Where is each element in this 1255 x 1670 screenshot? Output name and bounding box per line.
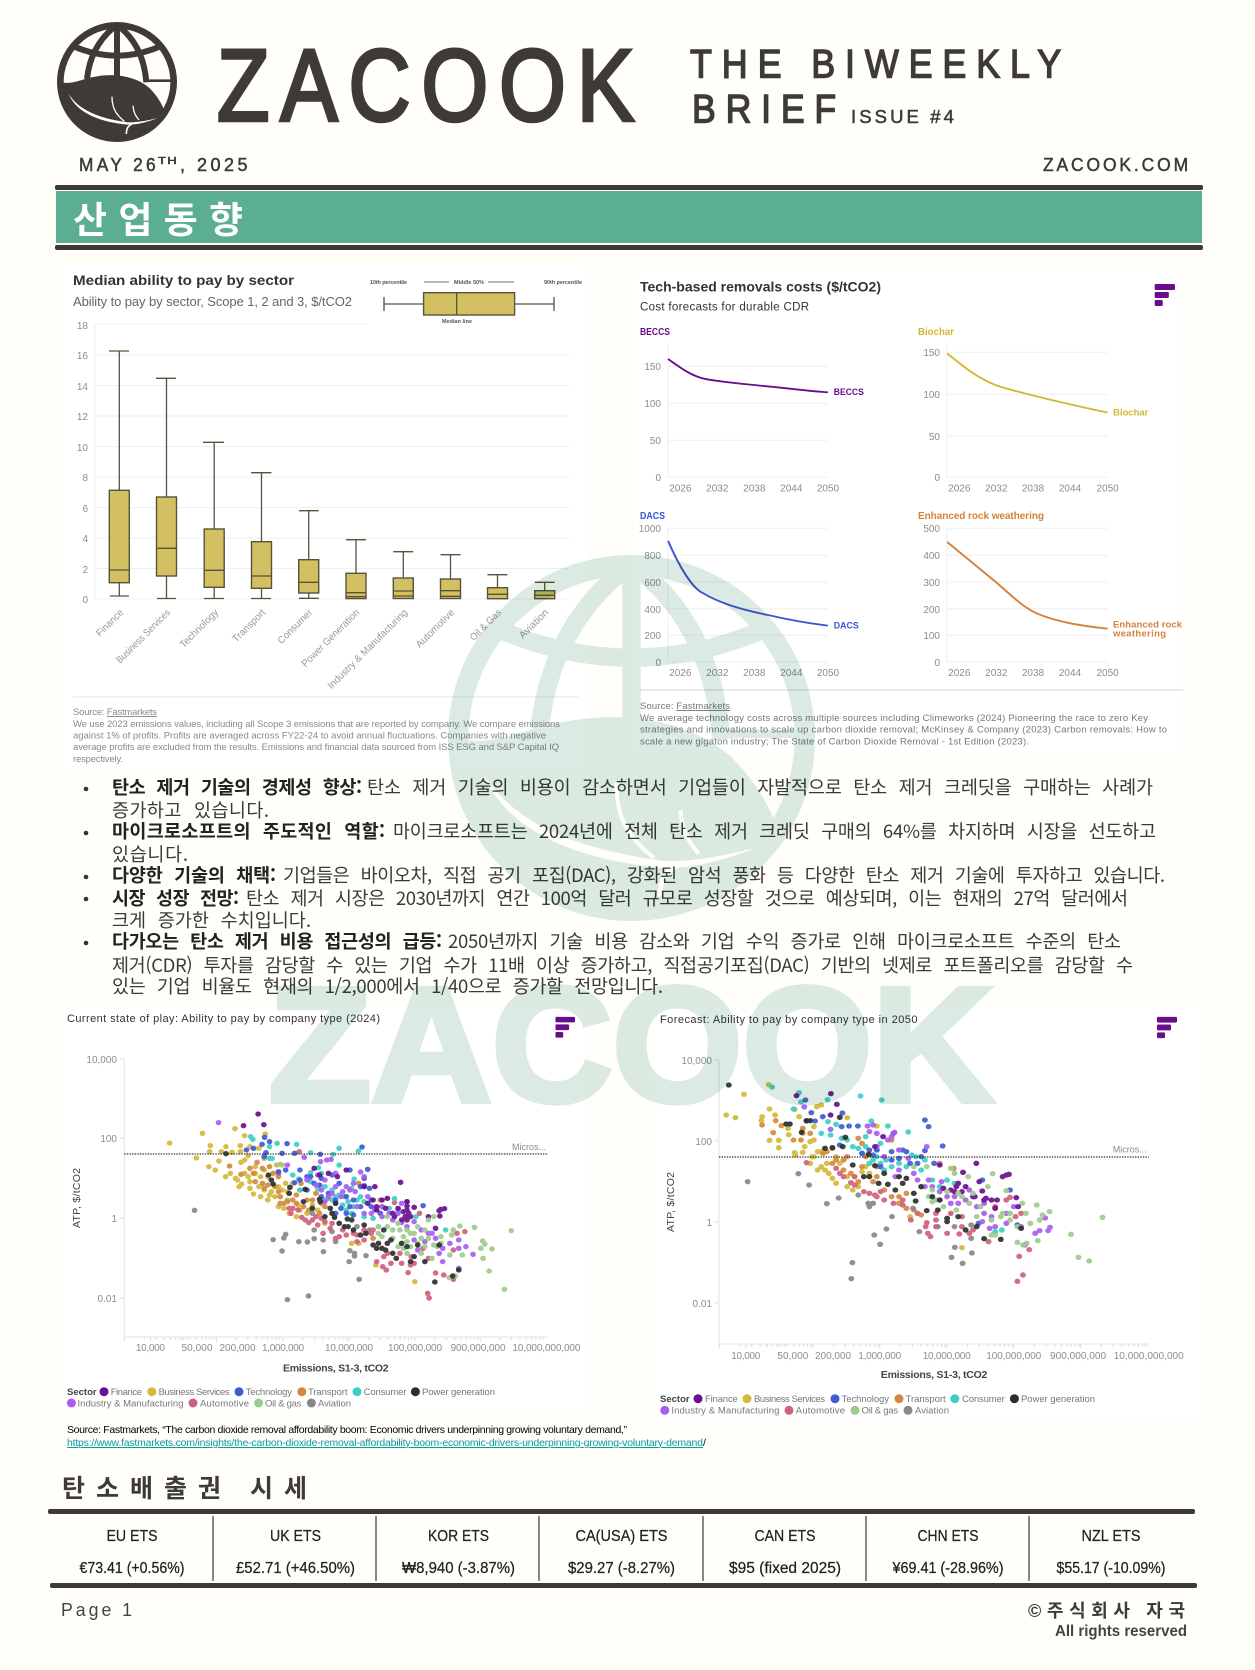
bullet: diverse technologies: 기업들은 바이오차, 직접 공기 포집(DAC), 강화된 암석 풍화 등 다양한 탄소 제거 기술에 투자하고 있습니다. (283, 862, 1165, 888)
small multiple: enhanced rock weathering: 2032 (985, 668, 1008, 679)
small multiple: BECCS: 2032 (706, 484, 729, 495)
box: automotive (440, 555, 460, 598)
section heading: carbon credit prices: 탄소배출권 시세 (62, 1469, 307, 1505)
legend: Sector (660, 1394, 690, 1405)
small multiple: BECCS: 150 (644, 362, 661, 373)
legend: Oil & gas (862, 1406, 898, 1417)
text block: key points (84, 774, 1165, 999)
small multiple: enhanced rock weathering: 2026 (948, 668, 971, 679)
reference line: microsoft: Micros... (1113, 1145, 1147, 1155)
legend: Sector (67, 1387, 97, 1398)
small multiple: BECCS (640, 327, 864, 495)
small multiple: biochar: Biochar (918, 327, 954, 338)
website: ZACOOK.COM (1043, 155, 1191, 175)
y axis labels: 10,000 (86, 1055, 117, 1066)
box: power generation (346, 540, 366, 599)
legend: Consumer (364, 1387, 406, 1398)
legend: Finance (111, 1387, 142, 1398)
small multiple: BECCS: 2044 (780, 484, 803, 495)
small multiple: biochar: 2044 (1059, 484, 1082, 495)
x axis sector labels (94, 607, 551, 691)
watermark: globe and wordmark: ZACOOK (269, 953, 993, 1136)
section banner: industry trends (55, 185, 1203, 250)
x axis labels: 10,000,000,000 (1114, 1351, 1184, 1362)
x axis labels: 10,000 (731, 1351, 761, 1362)
small multiple: enhanced rock weathering: 2044 (1059, 668, 1082, 679)
small multiple: BECCS: 2038 (743, 484, 766, 495)
dots (170, 1114, 511, 1300)
small multiple: biochar: 50 (929, 432, 940, 443)
bullet: microsoft role (84, 818, 1156, 867)
legend: Industry & Manufacturing (78, 1398, 184, 1410)
small multiple: biochar: 2050 (1096, 484, 1119, 495)
small multiple: biochar: 150 (923, 348, 940, 359)
bullet: accessibility: 다가오는 탄소 제거 비용 접근성의 급등: (112, 928, 442, 954)
source note: strategies and innovations to scale up carbon dioxide removal; McKinsey & Company (2023) Carbon removals: How to (640, 725, 1167, 736)
box: business services (156, 378, 176, 598)
y axis labels: 18 (77, 321, 88, 332)
legend: Aviation (318, 1398, 351, 1410)
cell: UK ETS (236, 1528, 355, 1577)
bullet: microsoft role: 있습니다. (112, 841, 188, 867)
legend: Industry & Manufacturing (671, 1406, 779, 1417)
x axis sector labels: Technology (178, 607, 221, 650)
x axis sector labels: Oil & Gas (468, 607, 504, 643)
y axis labels: 8 (82, 473, 88, 484)
legend: Finance (705, 1394, 738, 1405)
date: , 2025 (180, 155, 251, 175)
legend (660, 1394, 1095, 1417)
small multiple: biochar: Biochar (1113, 408, 1149, 419)
x axis labels (731, 1351, 1184, 1362)
legend (67, 1387, 495, 1410)
source note: scale a new gigaton industry; The State of Carbon Dioxide Removal - 1st Edition (2023). (640, 737, 1029, 748)
x axis labels: 10,000 (136, 1343, 165, 1354)
y axis labels: 16 (77, 351, 88, 362)
source note (73, 707, 560, 765)
small multiple: BECCS: 50 (650, 436, 661, 447)
cell: CHN ETS (892, 1528, 1004, 1577)
x axis sector labels: Finance (94, 607, 126, 639)
brand name: ZACOOK (217, 28, 645, 142)
y axis labels: 10 (77, 443, 88, 454)
small multiple: enhanced rock weathering: 400 (923, 551, 940, 562)
small multiple: biochar (918, 327, 1149, 495)
x axis labels: 1,000,000 (262, 1343, 304, 1354)
box: aviation (535, 582, 555, 599)
y axis labels: 1 (111, 1214, 117, 1225)
axes (715, 1060, 1149, 1348)
small multiple: biochar: 0 (934, 473, 940, 484)
cell: KOR ETS: KOR ETS (428, 1528, 489, 1545)
small multiple: enhanced rock weathering: 2050 (1096, 668, 1119, 679)
reference line: microsoft: Micros... (512, 1142, 546, 1152)
box: oil and gas (488, 575, 508, 599)
small multiple: biochar: 2032 (985, 484, 1008, 495)
x axis sector labels: Aviation (517, 607, 551, 641)
source note: Source: Fastmarkets (73, 707, 157, 718)
source note: Source: Fastmarkets (640, 701, 730, 712)
legend: Consumer (962, 1394, 1005, 1405)
small multiple: DACS (639, 511, 859, 679)
footer: copyright: ©주식회사 자국 (1028, 1601, 1185, 1621)
source citation: / (703, 1437, 706, 1449)
x axis labels: 50,000 (777, 1351, 809, 1362)
small multiple: enhanced rock weathering: 100 (923, 631, 940, 642)
chart subtitle: Ability to pay by sector, Scope 1, 2 and 3, $/tCO2 (73, 294, 352, 309)
x axis sector labels: Transport (231, 607, 268, 645)
issue number: ISSUE #4 (851, 107, 957, 127)
publication title line one: THE BIWEEKLY (690, 42, 1071, 86)
small multiple: BECCS: 2026 (669, 484, 692, 495)
small multiple: DACS: 800 (644, 551, 661, 562)
x axis labels: 50,000 (182, 1343, 213, 1354)
bullet: accessibility (84, 928, 1133, 999)
cell: CA(USA) ETS: $29.27 (-8.27%) (568, 1560, 675, 1577)
cell: CHN ETS: ¥69.41 (-28.96%) (892, 1560, 1004, 1577)
small multiple: enhanced rock weathering: 300 (923, 578, 940, 589)
cell: CAN ETS (729, 1528, 841, 1577)
x axis labels: 900,000,000 (450, 1343, 506, 1354)
y axis labels: 100 (100, 1134, 117, 1145)
y axis labels: 12 (77, 412, 88, 423)
legend: Technology (246, 1387, 292, 1398)
box: finance (109, 351, 129, 596)
small multiple: BECCS: 0 (655, 473, 661, 484)
cell: UK ETS: £52.71 (+46.50%) (236, 1560, 355, 1577)
chart subtitle: Cost forecasts for durable CDR (640, 302, 809, 314)
chart heading: Current state of play: Ability to pay by company type (2024) (67, 1013, 380, 1025)
box: transport (251, 473, 272, 598)
x axis labels: 900,000,000 (1050, 1351, 1106, 1362)
legend: Automotive (200, 1398, 249, 1410)
x axis sector labels: Industry & Manufacturing (326, 607, 410, 691)
bullet: market growth: 탄소 제거 시장은 2030년까지 연간 100억 달러 규모로 성장할 것으로 예상되며, 이는 현재의 27억 달러에서 (246, 885, 1128, 911)
small multiple: DACS: DACS (834, 620, 859, 631)
legend: Business Services (159, 1387, 230, 1398)
small multiple: DACS: 2026 (669, 668, 692, 679)
y axis title: ATP, $/tCO2 (71, 1168, 83, 1228)
panel: median ability to pay box plot (60, 265, 586, 770)
bullet: affordability: 증가하고 있습니다. (112, 797, 269, 823)
box: industry and manufacturing (393, 552, 413, 598)
box: consumer (299, 511, 319, 598)
cell: NZL ETS (1056, 1528, 1166, 1577)
footer: copyright (1028, 1601, 1187, 1640)
footer: page number: Page 1 (61, 1600, 135, 1620)
box plot legend: Middle 50% (454, 280, 484, 286)
x axis labels: 100,000,000 (986, 1351, 1042, 1362)
small multiple: enhanced rock weathering: Enhanced rock weathering (918, 511, 1044, 522)
source note: We use 2023 emissions values, including all Scope 3 emissions that are reported by company. We compare emissions (73, 719, 560, 730)
small multiple: DACS: 400 (644, 605, 661, 616)
panel: forecast scatter chart (651, 1007, 1200, 1421)
y axis labels: 100 (695, 1137, 712, 1148)
y axis labels: 2 (82, 565, 88, 576)
y axis labels (86, 1055, 117, 1305)
bullet: affordability (84, 774, 1153, 823)
legend: Automotive (796, 1406, 845, 1417)
y axis labels: 10,000 (681, 1056, 712, 1067)
icon: globe and leaf logo (57, 25, 175, 139)
source citation (67, 1424, 706, 1449)
x axis labels: 200,000 (815, 1351, 851, 1362)
y axis labels (681, 1056, 712, 1310)
source note: average profits are excluded from the results. Emissions and financial data sourced from ISS ESG and S&P Capital IQ (73, 742, 559, 753)
small multiple: DACS: 200 (644, 631, 661, 642)
cell: CHN ETS: CHN ETS (918, 1528, 978, 1545)
cell: CAN ETS: CAN ETS (754, 1528, 816, 1545)
dots (726, 1085, 1102, 1281)
chart heading: Tech-based removals costs ($/tCO2) (640, 280, 881, 295)
legend: Power generation (1021, 1394, 1095, 1405)
masthead (57, 25, 1191, 175)
x axis sector labels: Business Services (114, 607, 173, 666)
x axis labels: 1,000,000 (858, 1351, 902, 1362)
source note: against 1% of profits. Profits are averaged across FY22-24 to avoid annual fluctuations. Companies with negative (73, 730, 546, 742)
legend: Aviation (915, 1406, 949, 1417)
small multiple: BECCS: 100 (644, 399, 661, 410)
legend: Business Services (754, 1394, 825, 1405)
legend: Oil & gas (265, 1398, 302, 1410)
small multiple: enhanced rock weathering: Enhanced rock (1113, 620, 1183, 631)
chart heading: Forecast: Ability to pay by company type in 2050 (660, 1014, 918, 1026)
bullet: microsoft role: 마이크로소프트의 주도적인 역할: (112, 818, 385, 844)
y axis labels (77, 321, 88, 606)
x axis labels: 200,000 (220, 1343, 256, 1354)
y axis labels: 4 (82, 534, 88, 545)
cell: NZL ETS: $55.17 (-10.09%) (1056, 1560, 1166, 1577)
cell: EU ETS (80, 1528, 184, 1577)
bullet: microsoft role: 마이크로소프트는 2024년에 전체 탄소 제거 크레딧 구매의 64%를 차지하며 시장을 선도하고 (393, 818, 1156, 844)
bullet: accessibility: 있는 기업 비율도 현재의 1/2,000에서 1/40으로 증가할 전망입니다. (112, 973, 663, 999)
footer: copyright: All rights reserved (1055, 1623, 1187, 1640)
small multiple: enhanced rock weathering: 500 (923, 524, 940, 535)
small multiple: enhanced rock weathering: 200 (923, 605, 940, 616)
date: TH (158, 156, 178, 167)
cell: CA(USA) ETS (568, 1528, 675, 1577)
small multiple: BECCS: 2050 (817, 484, 840, 495)
source note (640, 701, 1167, 748)
bullet: accessibility: 제거(CDR) 투자를 감당할 수 있는 기업 수가 11배 이상 증가하고, 직접공기포집(DAC) 기반의 넷제로 포트폴리오를 감당할 수 (112, 952, 1133, 978)
y axis labels: 6 (82, 504, 88, 515)
legend: Transport (308, 1387, 348, 1398)
bullet: market growth (84, 885, 1128, 933)
bullet: accessibility: 2050년까지 기술 비용 감소와 기업 수익 증가로 인해 마이크로소프트 수준의 탄소 (448, 928, 1121, 954)
small multiple: DACS: 600 (644, 578, 661, 589)
date (79, 155, 251, 175)
bullet: market growth: 시장 성장 전망: (112, 885, 239, 911)
x axis title: Emissions, S1-3, tCO2 (881, 1369, 988, 1381)
x axis title: Emissions, S1-3, tCO2 (283, 1363, 389, 1375)
small multiple: DACS: 2050 (817, 668, 840, 679)
source note: We average technology costs across multiple sources including Climeworks (2024) Pioneering the race to zero Key (640, 713, 1148, 724)
y axis labels: 0.01 (98, 1294, 117, 1305)
cell: EU ETS: €73.41 (+0.56%) (80, 1560, 184, 1577)
watermark: globe and wordmark (269, 565, 993, 1136)
x axis labels (136, 1343, 581, 1354)
axes (120, 1059, 547, 1341)
cell: KOR ETS: ₩8,940 (-3.87%) (402, 1560, 515, 1577)
small multiple: BECCS: BECCS (640, 327, 670, 338)
cell: NZL ETS: NZL ETS (1082, 1528, 1140, 1545)
cell: UK ETS: UK ETS (270, 1528, 321, 1545)
legend: Transport (906, 1394, 946, 1405)
small multiple: DACS: 2032 (706, 668, 729, 679)
banner heading: 산업동향 (73, 190, 243, 244)
cell: CAN ETS: $95 (fixed 2025) (729, 1560, 841, 1577)
cell: KOR ETS (402, 1528, 515, 1577)
small multiple: biochar: 100 (923, 390, 940, 401)
cell: CA(USA) ETS: CA(USA) ETS (576, 1528, 668, 1545)
small multiple: enhanced rock weathering: weathering (1112, 629, 1166, 640)
source note: respectively. (73, 754, 123, 765)
bullet: market growth: 크게 증가한 수치입니다. (112, 907, 311, 933)
y axis labels: 14 (77, 382, 88, 393)
small multiple: biochar: 2038 (1022, 484, 1045, 495)
small multiple: DACS: 2044 (780, 668, 803, 679)
small multiple: enhanced rock weathering: 2038 (1022, 668, 1045, 679)
x axis sector labels: Power Generation (300, 607, 362, 670)
panel: current state scatter chart (61, 1007, 586, 1413)
box plot legend: 90th percentile (544, 280, 582, 286)
cell: EU ETS: EU ETS (106, 1528, 158, 1545)
x axis labels: 100,000,000 (388, 1343, 442, 1354)
x axis labels: 10,000,000,000 (512, 1343, 581, 1354)
small multiple: DACS: DACS (640, 511, 665, 522)
small multiple: DACS: 2038 (743, 668, 766, 679)
small multiple: enhanced rock weathering: 0 (934, 658, 940, 669)
box: technology (203, 442, 224, 598)
bullet: affordability: 탄소 제거 기술의 비용이 감소하면서 기업들이 자발적으로 탄소 제거 크레딧을 구매하는 사례가 (367, 774, 1153, 800)
box plot legend: 10th percentile (370, 280, 407, 286)
small multiple: biochar: 2026 (948, 484, 971, 495)
x axis sector labels: Consumer (276, 607, 316, 647)
legend: Technology (842, 1394, 889, 1405)
y axis labels: 1 (706, 1218, 712, 1229)
icon: fastmarkets logo (555, 1017, 575, 1038)
bullet: affordability: 탄소 제거 기술의 경제성 향상: (112, 774, 362, 800)
publication title line two: BRIEF (692, 88, 846, 132)
source citation: Source: Fastmarkets, “The carbon dioxide removal affordability boom: Economic drivers underpinning growing voluntary demand,” (67, 1424, 628, 1436)
panel: tech-based removals costs (633, 273, 1183, 753)
y axis gridlines (95, 324, 569, 599)
small multiple: enhanced rock weathering (918, 511, 1183, 679)
box plot legend (370, 280, 582, 325)
icon: fastmarkets logo (1155, 284, 1175, 306)
small multiple: DACS: 1000 (639, 524, 661, 535)
small multiple: BECCS: BECCS (834, 387, 864, 398)
x axis labels: 10,000,000 (325, 1343, 373, 1354)
legend: Power generation (422, 1387, 495, 1398)
chart heading: Median ability to pay by sector (73, 272, 295, 288)
table: carbon market prices (48, 1509, 1197, 1588)
x axis sector labels: Automotive (414, 607, 457, 650)
date: MAY 26 (79, 155, 159, 175)
bullet: diverse technologies: 다양한 기술의 채택: (112, 862, 276, 888)
small multiple: DACS: 0 (655, 658, 661, 669)
y axis title: ATP, $/tCO2 (665, 1172, 677, 1232)
box plot legend: Median line (442, 319, 472, 325)
icon: fastmarkets logo (1157, 1017, 1177, 1038)
x axis labels: 10,000,000 (923, 1351, 971, 1362)
y axis labels: 0 (82, 595, 88, 606)
y axis labels: 0.01 (693, 1299, 712, 1310)
source citation: https://www.fastmarkets.com/insights/the-carbon-dioxide-removal-affordability-boom-economic-drivers-underpinning-growing-voluntary-demand (67, 1437, 703, 1449)
